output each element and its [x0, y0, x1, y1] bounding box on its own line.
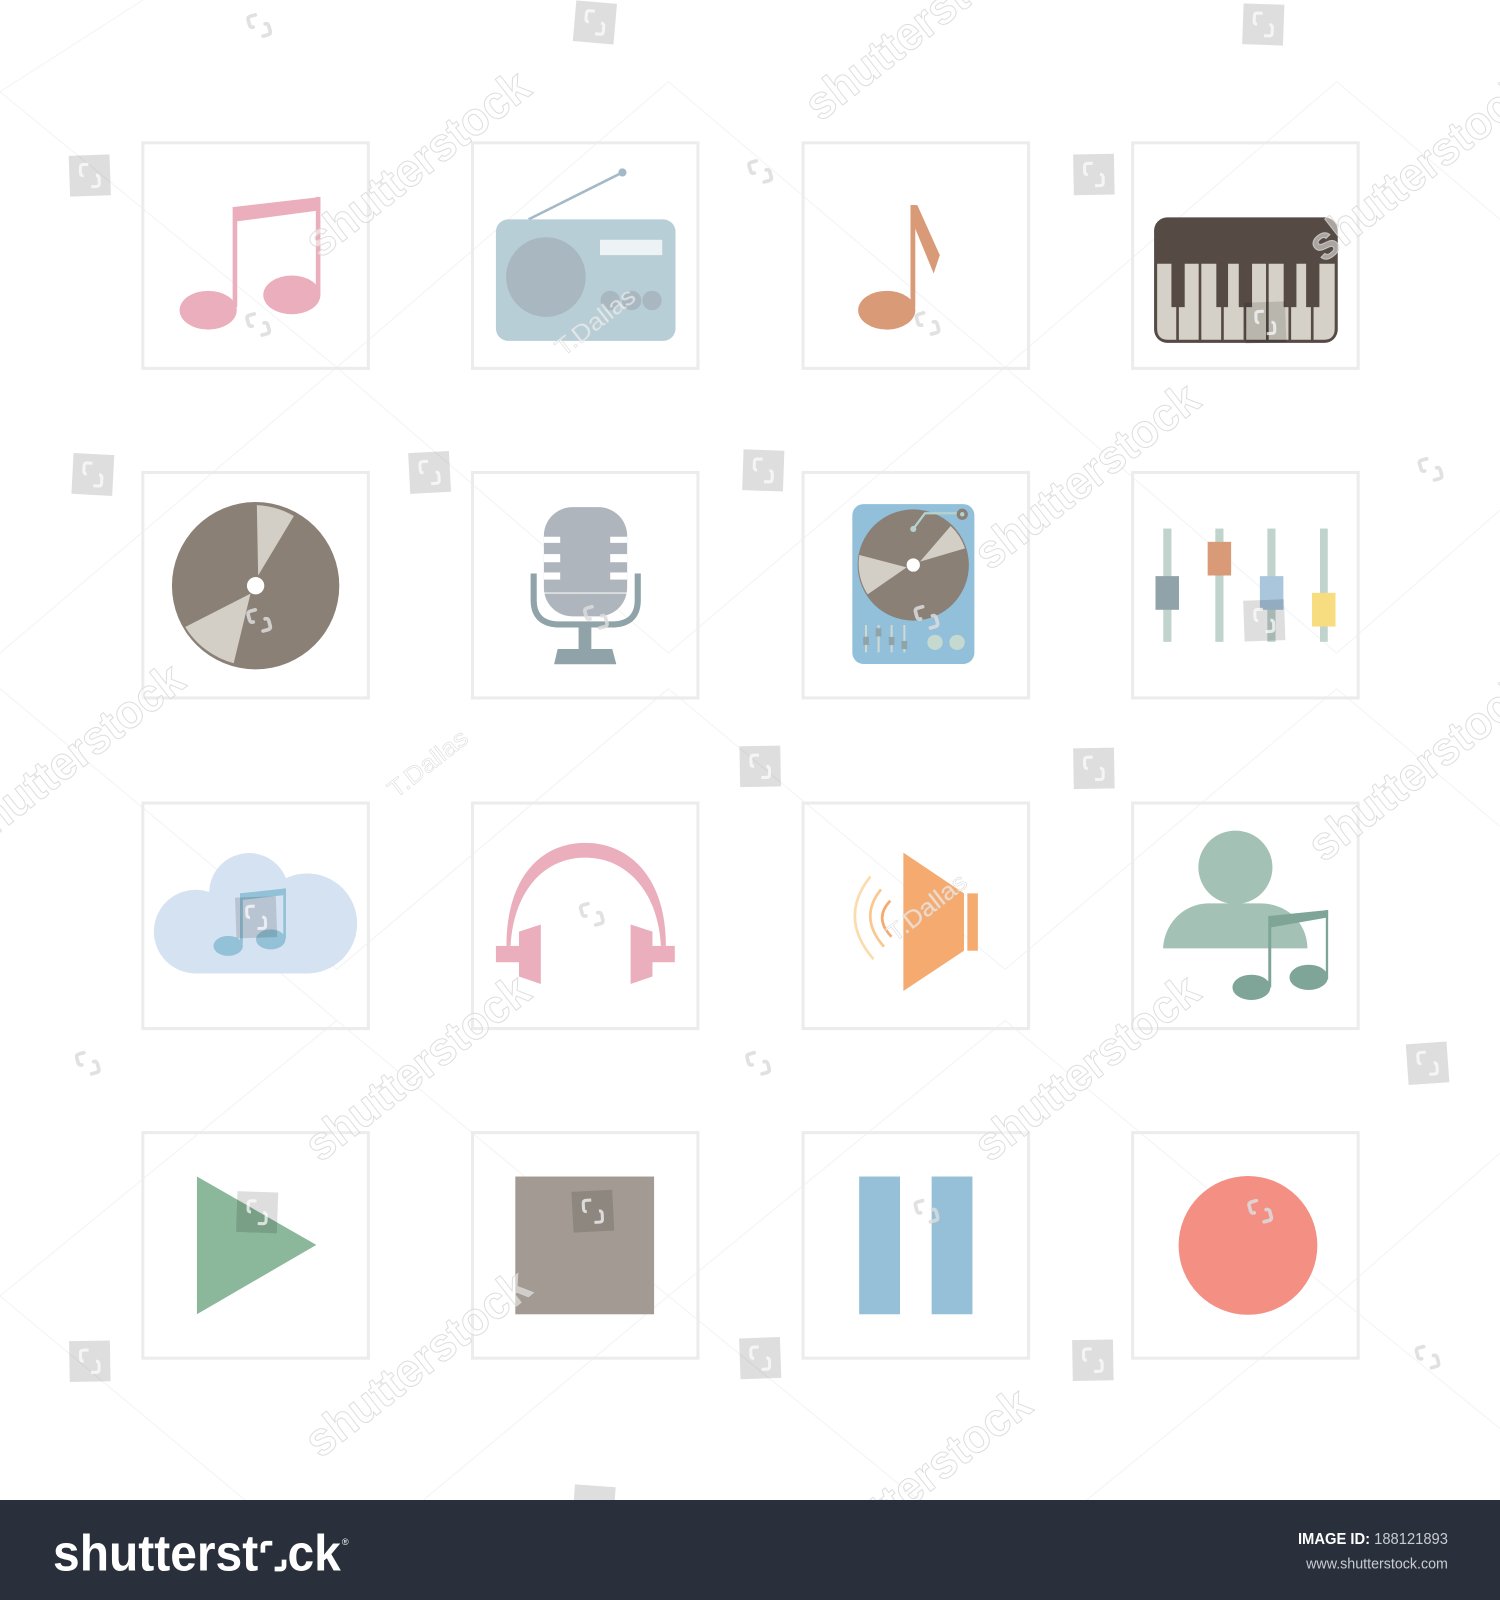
icon: speaker with sound waves — [855, 853, 978, 991]
icon: headphones — [496, 843, 675, 984]
footer website url: www.shutterstock.com — [1305, 1556, 1448, 1572]
watermark: shutterstock wordmarks: shutterstock — [295, 1259, 540, 1467]
icon: single music note — [858, 205, 940, 330]
watermark: contributor names: T.Dallas — [383, 725, 474, 804]
watermark: small outlined logos — [76, 12, 1442, 1370]
grid of icon tiles — [143, 143, 1358, 1358]
footer logo wordmark: shutterstock — [53, 1524, 341, 1581]
watermark: contributor names: T.Dallas — [882, 869, 973, 948]
watermark: shutterstock wordmarks: shutterstock — [964, 963, 1210, 1171]
watermark: shutterstock wordmarks: shutterstock — [796, 1376, 1041, 1584]
watermark: shutterstock wordmarks: shutterstock — [964, 371, 1210, 579]
icon: vinyl disc — [172, 502, 339, 669]
icon: stop button — [515, 1177, 654, 1314]
icon: mixer sliders — [1156, 529, 1336, 642]
icon: beamed music notes — [180, 197, 320, 330]
icon: radio — [496, 168, 676, 341]
watermark: contributor names: T.Dallas — [550, 283, 641, 362]
icon: music cloud — [154, 853, 357, 973]
footer bar — [0, 1500, 1500, 1600]
watermark: shutterstock wordmarks: shutterstock — [295, 963, 540, 1171]
footer image id: IMAGE ID: 188121893 — [1298, 1531, 1448, 1548]
icon: person with music notes — [1163, 831, 1328, 1000]
icon: turntable — [852, 504, 974, 664]
watermark: shutterstock wordmarks: shutterstock — [295, 59, 540, 267]
icon: piano keyboard — [1154, 217, 1338, 343]
watermark: contributor names — [383, 283, 973, 948]
icon: record button — [1179, 1176, 1317, 1315]
icon: pause button — [859, 1177, 972, 1314]
footer registered mark: ® — [342, 1537, 349, 1547]
footer logo mark — [263, 1543, 284, 1569]
icon: microphone — [534, 507, 638, 664]
icon: play button — [197, 1177, 316, 1314]
